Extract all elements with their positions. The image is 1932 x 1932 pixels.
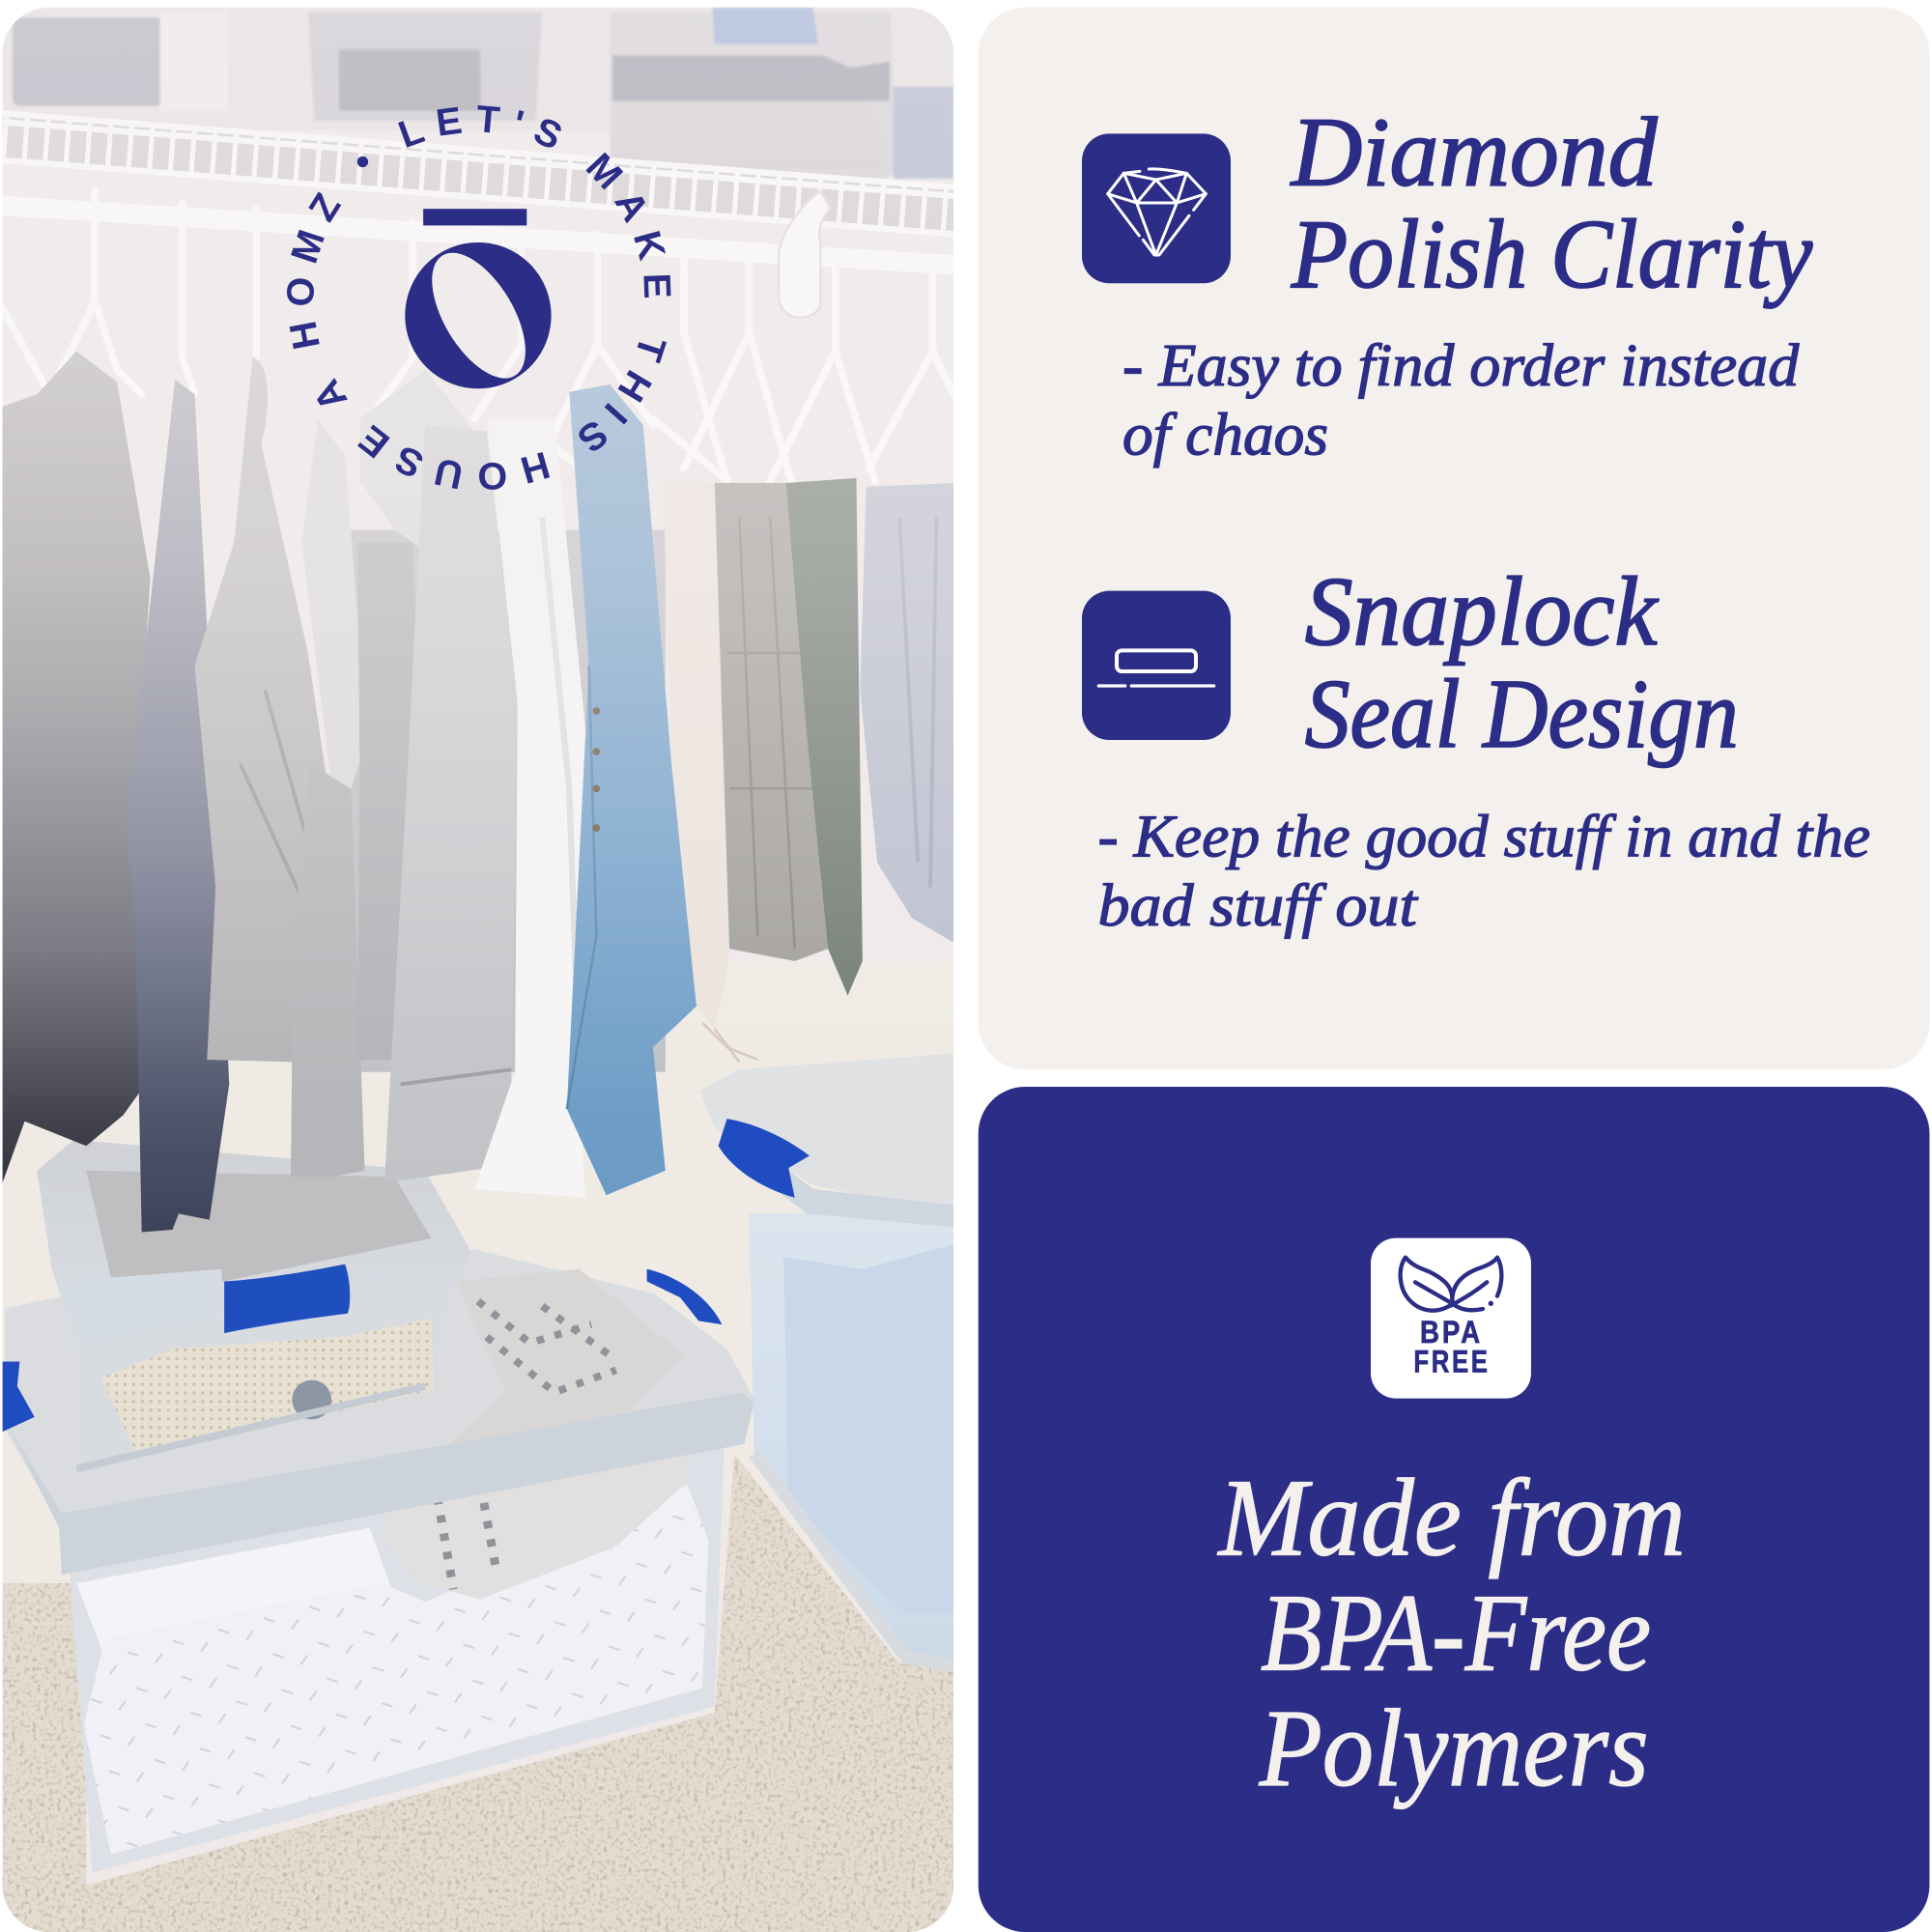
right storage bin: [699, 1054, 953, 1665]
icon: snaplock seal: [1082, 591, 1231, 740]
text: diamond description: - Easy to find order instead: [1122, 331, 1800, 399]
blue latch: [224, 1264, 350, 1333]
white pillow in bin: [76, 1528, 392, 1658]
heading: Made from BPA-Free Polymers: [1217, 1457, 1686, 1809]
small storage bin: [37, 1140, 470, 1472]
hangers: [3, 191, 953, 493]
wire shelf: [3, 113, 953, 237]
rod bracket: [779, 191, 831, 318]
panel: BPA free: [979, 1087, 1929, 1932]
logo bar: [423, 209, 526, 225]
garment: pale blue shirt: [860, 483, 953, 943]
text: snaplock description: bad stuff out: [1097, 871, 1419, 939]
hanging rod: [3, 206, 953, 265]
circular slogan text: • LET'S MAKE THIS HOUSE A HOMZ: [287, 105, 670, 490]
icon: BPA free badge: BPA: [1420, 1314, 1483, 1350]
lower wall: [3, 961, 953, 1589]
icon: diamond: [1082, 133, 1231, 283]
blue latch: [719, 1119, 810, 1198]
garment: green trousers: [786, 478, 863, 996]
logo with circular slogan: [287, 105, 670, 490]
carpet floor: [3, 1454, 953, 1932]
heading: Snaplock Seal Design: Seal Design: [1305, 660, 1739, 769]
large lid top surface: [5, 1250, 753, 1513]
heading: Made from BPA-Free Polymers: Made from: [1217, 1457, 1686, 1579]
heading: Made from BPA-Free Polymers: Polymers: [1259, 1687, 1649, 1809]
garment: white dress: [474, 529, 585, 1198]
garment: blue cardigan: [567, 384, 698, 1195]
text: diamond description: [1122, 331, 1800, 469]
photo panel: closet with clothes and storage bins: [3, 8, 953, 1932]
garment: plaid grey trousers: [715, 483, 828, 961]
panel: features: [979, 8, 1929, 1069]
heading: Snaplock Seal Design: Snaplock: [1305, 557, 1659, 667]
garment: dark dress: [3, 352, 151, 1182]
knit blanket: [101, 1319, 434, 1457]
large storage bin: [3, 1249, 754, 1873]
top shelf bins: [3, 8, 953, 185]
icon: BPA free badge: FREE: [1413, 1344, 1491, 1379]
small lid rim: [111, 1269, 222, 1304]
heading: Diamond Polish Clarity: Polish Clarity: [1291, 200, 1813, 309]
garment: large grey tee: [384, 425, 518, 1182]
knit button: [292, 1380, 331, 1419]
text: snaplock description: - Keep the good stuff in and the: [1097, 802, 1870, 869]
large lid rim: [6, 1392, 754, 1575]
icon: BPA free badge: [1371, 1238, 1531, 1399]
large lid latches: [647, 1269, 722, 1324]
garment: slate dress: [126, 380, 229, 1233]
garment: ruffled grey top: [195, 357, 327, 1063]
wash fading the upper photo: [3, 8, 953, 1117]
garment: hooded top: [359, 370, 474, 554]
patterned pillow: [449, 1488, 680, 1600]
heading: Diamond Polish Clarity: Diamond: [1290, 98, 1659, 207]
text: snaplock description: [1097, 802, 1870, 939]
garment backdrop: [352, 529, 666, 1072]
garment: cream scarf: [665, 529, 729, 1006]
heading: Snaplock Seal Design: [1305, 557, 1739, 769]
garment: grey scarf and lower hem: [291, 764, 365, 1177]
logo ring: [405, 242, 552, 388]
white comforter: [84, 1485, 708, 1855]
text: diamond description: of chaos: [1122, 401, 1328, 469]
heading: Diamond Polish Clarity: [1290, 98, 1813, 309]
heading: Made from BPA-Free Polymers: BPA-Free: [1261, 1571, 1651, 1693]
